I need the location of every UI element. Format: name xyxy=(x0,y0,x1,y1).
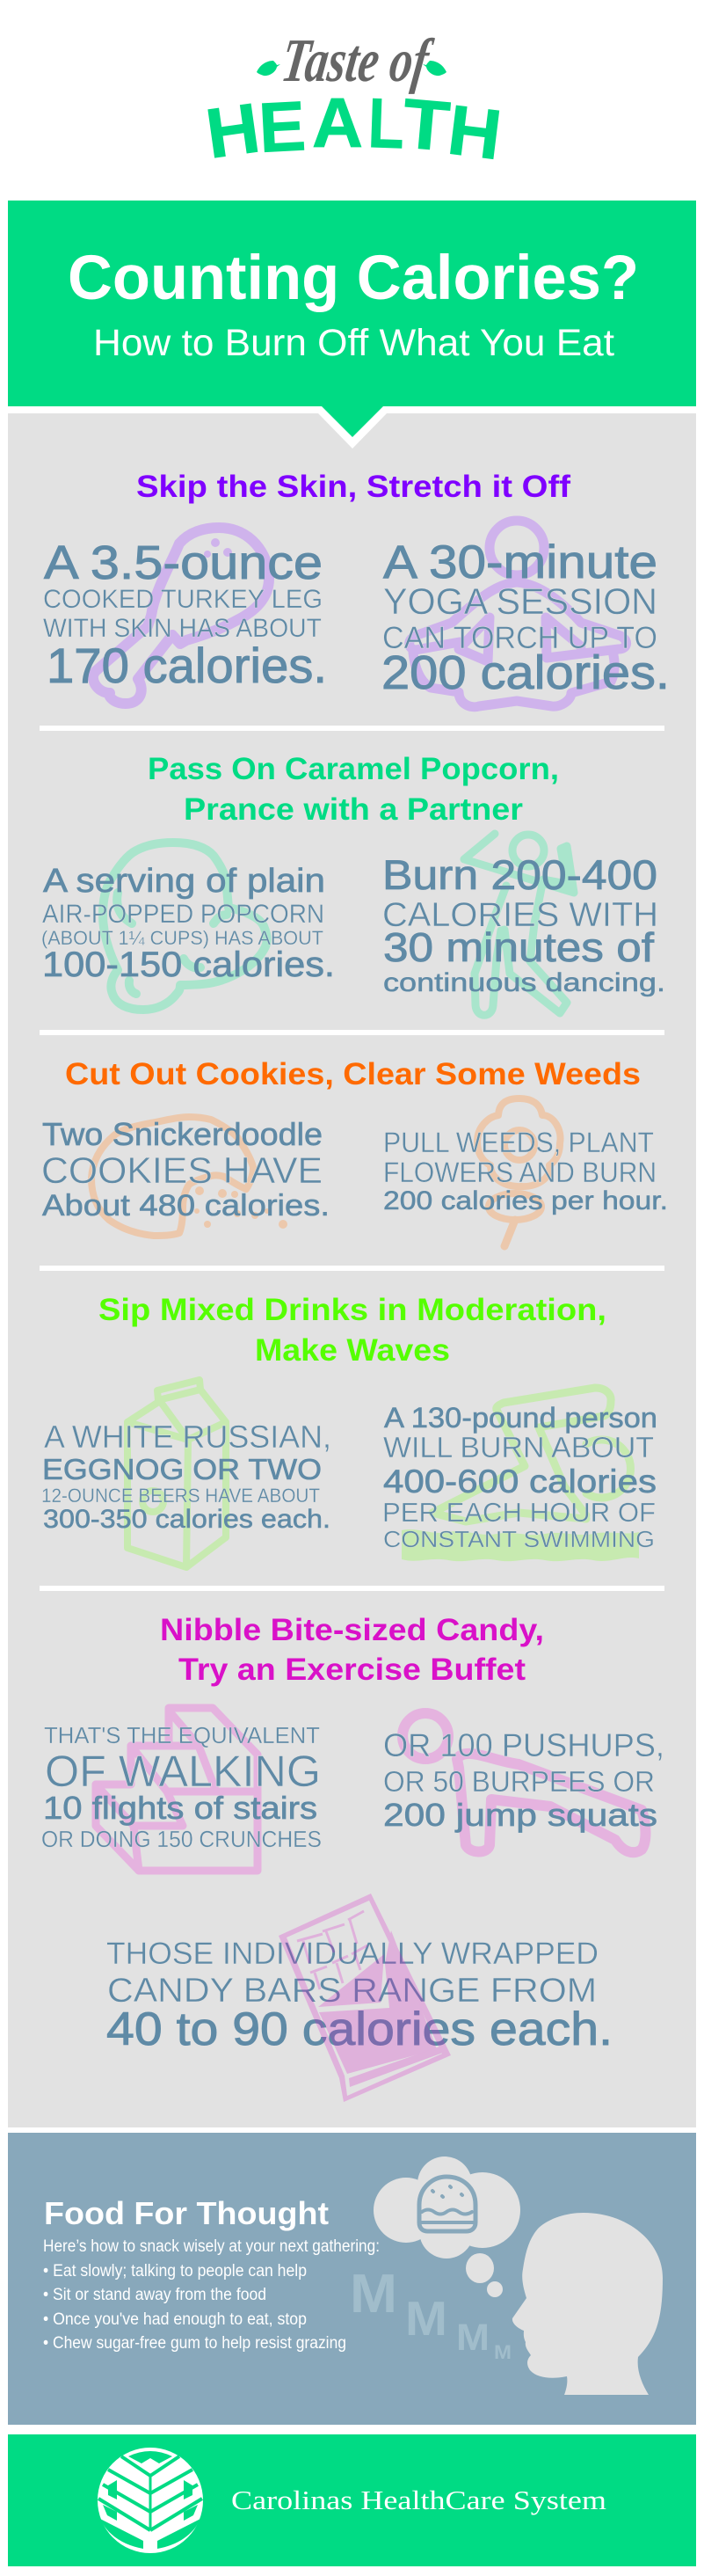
icon: candy bar xyxy=(279,1894,451,2102)
icon: cookie xyxy=(91,1117,287,1236)
icon: right leaf xyxy=(423,61,446,76)
text: yoga fact: A 30-minute xyxy=(383,536,657,588)
text: pushups fact: OR 100 PUSHUPS, xyxy=(383,1727,664,1763)
letters: Mmmm: M xyxy=(494,2341,512,2363)
section: Cookies xyxy=(41,1057,668,1246)
heading: Pass On Caramel Popcorn, xyxy=(148,752,559,786)
panel: grey content background xyxy=(8,413,696,2127)
text: candy bar fact: 40 to 90 calories each. xyxy=(106,2003,613,2055)
icon: head silhouette xyxy=(512,2213,663,2395)
heading xyxy=(98,1293,606,1368)
text: stairs fact: OF WALKING xyxy=(45,1747,321,1796)
section: Caramel Popcorn xyxy=(41,752,665,1015)
icon: thought bubble xyxy=(374,2156,520,2297)
text: popcorn fact: 100-150 calories. xyxy=(42,945,335,984)
logo wordmark: HEALTH: L xyxy=(367,84,405,163)
text: turkey leg fact: A 3.5-ounce xyxy=(44,536,323,589)
heading: Sip Mixed Drinks in Moderation, xyxy=(98,1293,606,1327)
tips list: • Eat slowly; talking to people can help xyxy=(43,2262,307,2280)
heading: Make Waves xyxy=(255,1333,450,1368)
text: drinks fact: EGGNOG OR TWO xyxy=(42,1453,322,1485)
logo wordmark: HEALTH: H xyxy=(444,91,505,174)
text: pushups fact: 200 jump squats xyxy=(383,1797,657,1833)
tips list: • Once you've had enough to eat, stop xyxy=(43,2310,307,2329)
logo wordmark: HEALTH: A xyxy=(312,84,363,162)
text: stairs fact: 10 flights of stairs xyxy=(43,1790,317,1826)
text: dancing fact: CALORIES WITH xyxy=(382,896,658,934)
text: swimming fact: 400-600 calories xyxy=(383,1463,657,1500)
icon: yoga person xyxy=(410,521,627,707)
text: swimming fact: A 130-pound person xyxy=(384,1402,657,1434)
heading: Skip the Skin, Stretch it Off xyxy=(136,470,570,504)
title: Counting Calories? xyxy=(68,244,639,313)
heading: Prance with a Partner xyxy=(184,792,523,827)
logo script: Taste of: Taste of xyxy=(278,26,437,95)
icon: stairs xyxy=(96,1708,258,1871)
text: dancing fact: continuous dancing. xyxy=(383,968,665,997)
text: weeding fact: PULL WEEDS, PLANT xyxy=(383,1127,654,1158)
text: turkey leg fact xyxy=(43,536,327,693)
text: candy bar fact: THOSE INDIVIDUALLY WRAPPED xyxy=(106,1937,599,1971)
icon: dancer xyxy=(464,834,574,1015)
text: turkey leg fact: 170 calories. xyxy=(47,638,327,693)
text: cookie fact: About 480 calories. xyxy=(42,1189,330,1222)
text: drinks fact xyxy=(41,1419,331,1534)
logo wordmark: HEALTH xyxy=(201,84,505,174)
icon: Carolinas HealthCare leaf logo xyxy=(98,2448,203,2553)
text: swimming fact: CONSTANT SWIMMING xyxy=(383,1526,655,1552)
tips list xyxy=(43,2237,380,2353)
text: drinks fact: A WHITE RUSSIAN, xyxy=(44,1419,331,1455)
text: turkey leg fact: COOKED TURKEY LEG xyxy=(43,585,323,614)
logo wordmark: HEALTH: T xyxy=(400,84,453,166)
section: Candy xyxy=(41,1613,664,2102)
text: weeding fact: 200 calories per hour. xyxy=(383,1186,668,1215)
letters: Mmmm: M xyxy=(405,2291,447,2346)
icon: swimmer xyxy=(402,1388,639,1561)
text: dancing fact: 30 minutes of xyxy=(383,924,654,970)
heading xyxy=(160,1613,544,1687)
letters: Mmmm: M xyxy=(456,2317,490,2359)
text: pushups fact: OR 50 BURPEES OR xyxy=(383,1765,655,1798)
text: stairs fact: OR DOING 150 CRUNCHES xyxy=(41,1826,322,1852)
heading: Try an Exercise Buffet xyxy=(178,1653,526,1687)
icon: flower xyxy=(477,1098,561,1246)
text: pushups fact xyxy=(383,1727,664,1833)
logo: Taste of Health xyxy=(201,26,505,174)
text: drinks fact: 300-350 calories each. xyxy=(43,1505,330,1534)
waves xyxy=(402,1529,639,1561)
heading: Food For Thought xyxy=(44,2195,329,2231)
icon: burger xyxy=(419,2177,475,2231)
text: popcorn fact: AIR-POPPED POPCORN xyxy=(42,900,324,929)
heading: Nibble Bite-sized Candy, xyxy=(160,1613,544,1647)
icon: milk carton xyxy=(127,1380,226,1567)
text: yoga fact xyxy=(381,536,670,699)
heading: Cut Out Cookies, Clear Some Weeds xyxy=(65,1057,641,1091)
text: swimming fact: PER EACH HOUR OF xyxy=(382,1497,656,1528)
text: yoga fact: 200 calories. xyxy=(381,646,670,699)
icon: left leaf xyxy=(257,61,280,76)
heading xyxy=(148,752,559,827)
text: drinks fact: 12-OUNCE BEERS HAVE ABOUT xyxy=(41,1485,320,1507)
tips list: Here’s how to snack wisely at your next gathering: xyxy=(43,2237,380,2256)
text: swimming fact: WILL BURN ABOUT xyxy=(383,1431,654,1463)
tips list: • Sit or stand away from the food xyxy=(43,2286,266,2304)
letters: Mmmm xyxy=(350,2264,512,2363)
panel: green title banner xyxy=(8,201,696,437)
icon: popcorn xyxy=(103,843,267,1010)
pointer xyxy=(322,406,383,437)
text: cookie fact xyxy=(41,1116,330,1222)
text: stairs fact: THAT'S THE EQUIVALENT xyxy=(44,1722,320,1748)
text: yoga fact: CAN TORCH UP TO xyxy=(382,621,657,655)
text: popcorn fact: A serving of plain xyxy=(43,863,325,900)
text: popcorn fact xyxy=(41,863,335,984)
icon: turkey leg xyxy=(93,528,269,704)
tips list: • Chew sugar-free gum to help resist grazing xyxy=(43,2334,346,2353)
subtitle: How to Burn Off What You Eat xyxy=(93,322,614,364)
panel: footer xyxy=(8,2434,696,2566)
text: weeding fact: FLOWERS AND BURN xyxy=(383,1157,657,1188)
text: candy bar fact xyxy=(106,1937,613,2055)
text: popcorn fact: (ABOUT 1¼ CUPS) HAS ABOUT xyxy=(41,927,323,949)
organisation name: Carolinas HealthCare System xyxy=(231,2485,606,2515)
text: weeding fact xyxy=(383,1127,668,1215)
text: dancing fact xyxy=(382,851,665,997)
icon: pushup person xyxy=(403,1713,645,1852)
text: cookie fact: COOKIES HAVE xyxy=(41,1149,323,1191)
text: cookie fact: Two Snickerdoodle xyxy=(42,1116,323,1152)
text: candy bar fact: CANDY BARS RANGE FROM xyxy=(107,1972,597,2010)
letters: Mmmm: M xyxy=(350,2264,397,2324)
section: Mixed Drinks xyxy=(41,1293,657,1567)
logo wordmark: HEALTH: E xyxy=(257,86,308,167)
text: dancing fact: Burn 200-400 xyxy=(382,851,657,898)
text: yoga fact: YOGA SESSION xyxy=(383,580,657,622)
text: swimming fact xyxy=(382,1402,657,1552)
text: turkey leg fact: WITH SKIN HAS ABOUT xyxy=(43,614,322,643)
logo wordmark: HEALTH: H xyxy=(201,88,265,173)
section: Skip the Skin xyxy=(43,470,670,707)
text: stairs fact xyxy=(41,1722,322,1852)
panel: Food For Thought xyxy=(8,2133,696,2425)
notch: white outline of the pointer xyxy=(318,413,387,449)
